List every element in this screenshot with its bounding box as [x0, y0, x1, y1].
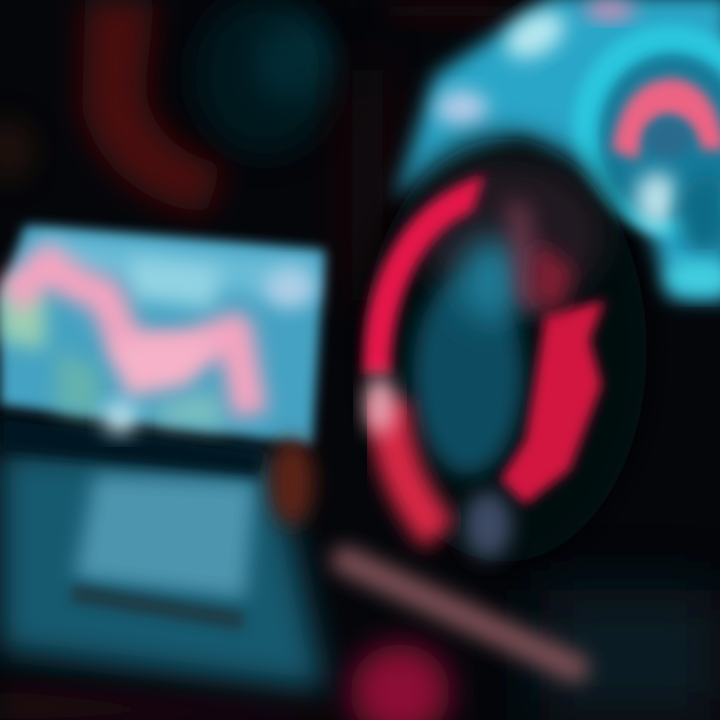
laptop base — [0, 415, 380, 720]
hinge shadow — [0, 415, 265, 476]
laptop screen — [0, 225, 325, 445]
panel: background dashboard screen — [395, 0, 720, 300]
bottom red glow — [350, 644, 450, 720]
keyboard bar — [70, 584, 245, 630]
chart: concentric rings — [572, 25, 720, 294]
line chart — [10, 262, 250, 415]
trackpad — [75, 475, 255, 598]
hand silhouette — [270, 438, 314, 526]
red left arc — [372, 190, 470, 365]
red right gear — [500, 300, 605, 505]
inner dial — [413, 275, 523, 475]
gauge stand — [345, 560, 575, 668]
gauge — [363, 138, 647, 562]
dial lower highlight — [464, 491, 512, 559]
